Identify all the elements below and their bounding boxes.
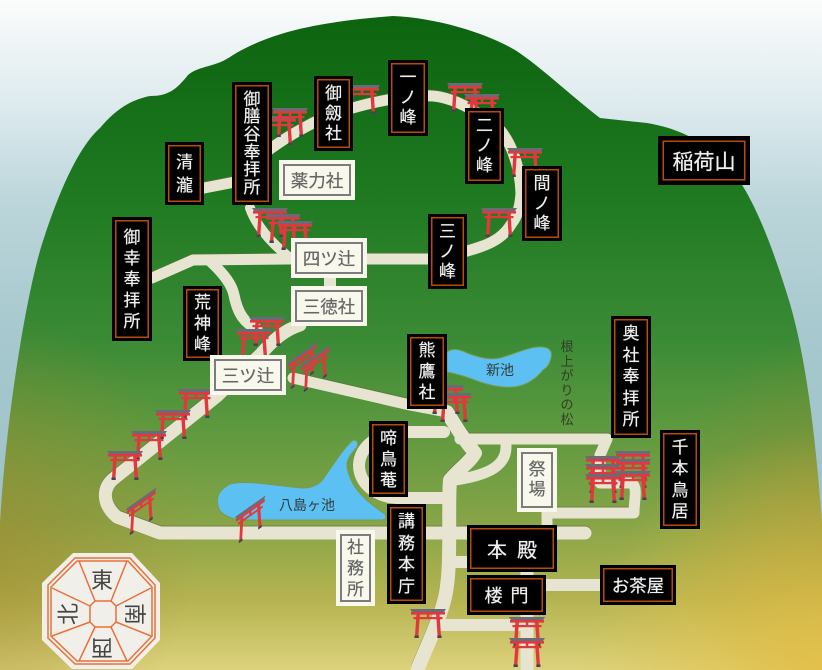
label: 啼鳥菴: 啼 — [380, 428, 397, 448]
label: 二ノ峰 — [465, 108, 504, 184]
label: お茶屋 — [600, 565, 676, 605]
label: 稲荷山: 稲荷山 — [672, 150, 736, 174]
label: 間ノ峰: ノ — [534, 194, 550, 212]
compass: 東 — [91, 568, 113, 593]
label: 三ノ峰: 峰 — [439, 262, 456, 280]
label: 社務所 — [336, 530, 375, 606]
label: 三徳社 — [291, 286, 367, 326]
label: 一ノ峰 — [388, 60, 428, 136]
label: 社務所: 社 — [347, 538, 364, 556]
label: 薬力社 — [279, 160, 355, 200]
label: 稲荷山 — [658, 136, 750, 185]
pond label: shin-ike: 新池 — [486, 362, 514, 378]
label: 御膳谷奉拝所: 谷 — [244, 125, 260, 144]
label: 講務本庁: 本 — [398, 555, 415, 574]
label: 御幸奉拝所: 幸 — [124, 248, 140, 268]
compass — [42, 553, 160, 669]
label: 根上がりの松: が — [560, 368, 574, 383]
compass: 西 — [91, 635, 113, 660]
label: 御劔社: 御 — [325, 84, 342, 102]
label: 御幸奉拝所: 奉 — [124, 270, 140, 288]
label: 楼門: 楼門 — [484, 586, 536, 606]
label: 清瀧: 清 — [176, 152, 193, 172]
label: 祭場 — [517, 448, 557, 512]
label: 間ノ峰: 峰 — [534, 214, 550, 232]
label: 三ツ辻: 三ツ辻 — [222, 366, 274, 386]
label: 三ツ辻 — [210, 355, 286, 395]
label: 間ノ峰 — [522, 166, 562, 241]
label: 根上がりの松 — [560, 339, 574, 426]
label: 千本鳥居: 千 — [672, 438, 688, 456]
label: 二ノ峰: 二 — [476, 116, 493, 135]
label: 荒神峰: 神 — [194, 314, 211, 333]
label: 御膳谷奉拝所: 御 — [244, 90, 260, 109]
label: 四ツ辻 — [291, 238, 367, 278]
label: 御膳谷奉拝所: 奉 — [244, 142, 260, 162]
label: 奥社奉拝所: 所 — [622, 410, 640, 429]
label: 根上がりの松: 松 — [560, 412, 574, 426]
label: 本殿: 本殿 — [487, 540, 547, 562]
label: 祭場: 祭 — [528, 460, 546, 479]
label: 一ノ峰: ノ — [400, 88, 416, 107]
label: 三ノ峰: 三 — [439, 222, 456, 240]
label: 根上がりの松: 上 — [560, 354, 574, 368]
label: 熊鷹社: 熊 — [418, 341, 436, 360]
label: 熊鷹社: 鷹 — [418, 362, 436, 381]
label: 御膳谷奉拝所 — [232, 82, 272, 205]
label: 熊鷹社 — [407, 334, 447, 409]
label: 一ノ峰: 峰 — [400, 108, 416, 127]
roads — [105, 95, 635, 668]
label: 奥社奉拝所 — [611, 316, 651, 438]
label: 啼鳥菴: 鳥 — [380, 450, 397, 468]
label: 一ノ峰: 一 — [400, 68, 416, 87]
label: 千本鳥居: 本 — [672, 459, 688, 478]
label: 三ノ峰: ノ — [439, 242, 456, 260]
label: 三徳社: 三徳社 — [303, 296, 355, 316]
label: 根上がりの松: り — [560, 382, 574, 398]
label: 御幸奉拝所: 拝 — [124, 290, 140, 310]
label: 啼鳥菴 — [369, 421, 408, 497]
label: 社務所: 務 — [347, 558, 364, 578]
label: 根上がりの松: 根 — [560, 339, 574, 354]
label: 祭場: 場 — [528, 480, 546, 499]
label: 社務所: 所 — [347, 580, 364, 598]
pond: yashima-ga-ike — [217, 440, 386, 520]
pond label: yashima-ga-ike: 八島ヶ池 — [279, 497, 335, 513]
label: 御劔社 — [314, 76, 353, 151]
label: 間ノ峰: 間 — [534, 174, 550, 192]
upper loop — [152, 96, 521, 278]
label: 奥社奉拝所: 奥 — [622, 324, 640, 343]
label: 啼鳥菴: 菴 — [380, 470, 397, 490]
label: 千本鳥居: 鳥 — [672, 480, 688, 500]
label: 奥社奉拝所: 拝 — [622, 389, 640, 408]
label: 講務本庁: 講 — [398, 512, 415, 531]
label: 御幸奉拝所 — [112, 217, 152, 341]
label: 御膳谷奉拝所: 膳 — [244, 107, 260, 126]
label: 御幸奉拝所: 御 — [124, 228, 140, 246]
label: 薬力社: 薬力社 — [291, 170, 343, 190]
label: 御劔社: 社 — [325, 124, 342, 142]
label: 荒神峰: 峰 — [194, 335, 211, 354]
label: 講務本庁: 務 — [398, 534, 415, 552]
label: 根上がりの松: の — [560, 397, 574, 412]
label: 御劔社: 劔 — [325, 104, 342, 122]
label: 四ツ辻: 四ツ辻 — [303, 248, 355, 268]
compass: 南 — [122, 603, 147, 625]
label: 講務本庁 — [387, 504, 426, 604]
pond: shin-ike — [447, 347, 551, 387]
label: 奥社奉拝所: 社 — [622, 346, 640, 365]
label: 荒神峰 — [183, 286, 222, 361]
label: 清瀧 — [165, 142, 204, 205]
label: 御幸奉拝所: 所 — [124, 312, 140, 330]
label: 三ノ峰 — [428, 214, 467, 289]
label: 千本鳥居 — [660, 430, 700, 529]
label: お茶屋: お茶屋 — [612, 576, 664, 596]
compass: 北 — [56, 603, 81, 625]
label: 二ノ峰: 峰 — [476, 156, 493, 175]
label: 本殿 — [467, 525, 557, 572]
label: 講務本庁: 庁 — [398, 576, 415, 596]
label: 二ノ峰: ノ — [476, 136, 493, 155]
label: 荒神峰: 荒 — [194, 293, 211, 312]
label: 熊鷹社: 社 — [418, 383, 436, 402]
torii gates — [107, 83, 651, 667]
label: 奥社奉拝所: 奉 — [622, 367, 640, 386]
label: 御膳谷奉拝所: 拝 — [244, 160, 260, 179]
label: 清瀧: 瀧 — [176, 176, 193, 194]
label: 千本鳥居: 居 — [672, 502, 688, 521]
label: 御膳谷奉拝所: 所 — [244, 178, 260, 197]
label: 楼門 — [467, 575, 546, 615]
